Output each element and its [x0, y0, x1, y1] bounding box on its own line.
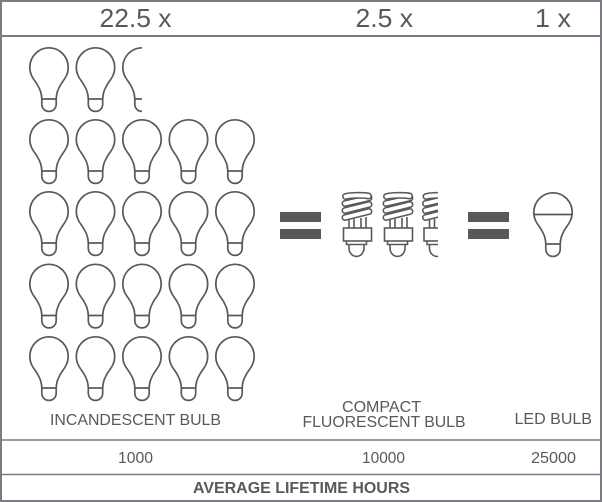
LED bulb: [534, 193, 572, 256]
label: LED bulb: LED BULB: [514, 411, 592, 428]
value: 25000 hours: 25000: [531, 450, 576, 467]
equals sign: right: [468, 212, 509, 239]
label: incandescent bulb: INCANDESCENT BULB: [50, 412, 221, 429]
header: 2.5 x: 2.5 x: [356, 3, 413, 33]
label: compact fluorescent bulb: [302, 399, 466, 431]
footer: average lifetime hours: AVERAGE LIFETIME HOURS: [193, 480, 410, 497]
header: 1 x: 1 x: [535, 3, 571, 33]
compact fluorescent bulb group: [344, 195, 452, 256]
header: 22.5 x: 22.5 x: [100, 3, 172, 33]
incandescent bulb group: [30, 48, 254, 400]
label: compact fluorescent bulb: FLUORESCENT BULB: [302, 414, 466, 431]
value: 10000 hours: 10000: [362, 450, 405, 467]
equals sign: left: [280, 212, 321, 239]
value: 1000 hours: 1000: [118, 450, 153, 467]
label: compact fluorescent bulb: COMPACT: [342, 399, 421, 416]
